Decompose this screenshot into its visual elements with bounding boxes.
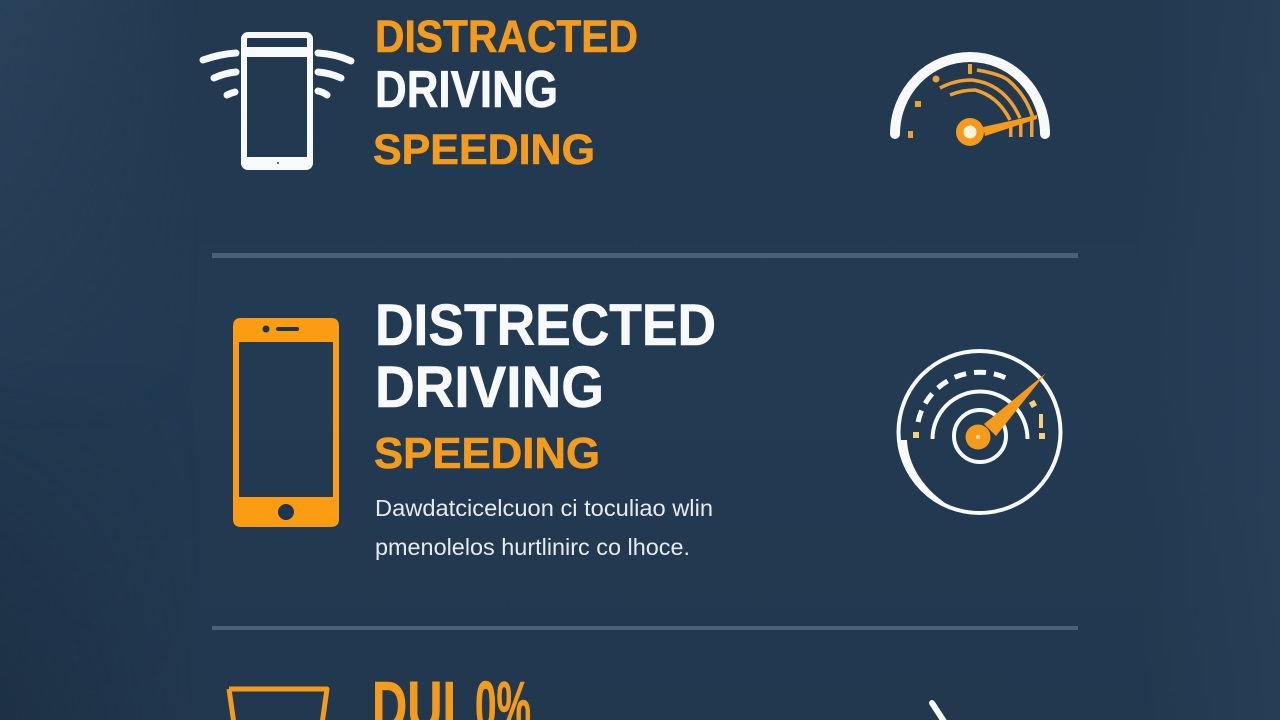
icon: speedometer needle bbox=[932, 703, 947, 720]
icon: white and orange speedometer bbox=[895, 57, 1045, 146]
body text bbox=[375, 495, 713, 560]
heading: speeding: SPEEDING bbox=[373, 126, 595, 174]
body text: pmenolelos hurtlinirc co lhoce. bbox=[375, 534, 690, 560]
heading: driving: DRIVING bbox=[375, 61, 558, 119]
body text: Dawdatcicelcuon ci toculiao wlin bbox=[375, 495, 713, 521]
divider bbox=[212, 253, 1078, 258]
heading: distracted: DISTRACTED bbox=[375, 11, 638, 62]
panel: top row bbox=[203, 11, 1045, 174]
icon: round speedometer bbox=[897, 351, 1060, 513]
heading: speeding: SPEEDING bbox=[374, 429, 600, 478]
icon: white phone with signal waves bbox=[203, 35, 351, 167]
panel: bottom row bbox=[229, 667, 947, 720]
icon: glass bbox=[229, 689, 327, 720]
panel: middle row bbox=[233, 293, 1060, 560]
heading: distrected: DISTRECTED bbox=[375, 293, 716, 358]
divider bbox=[212, 626, 1078, 630]
heading: driving: DRIVING bbox=[375, 355, 604, 420]
icon: orange phone bbox=[233, 318, 339, 527]
